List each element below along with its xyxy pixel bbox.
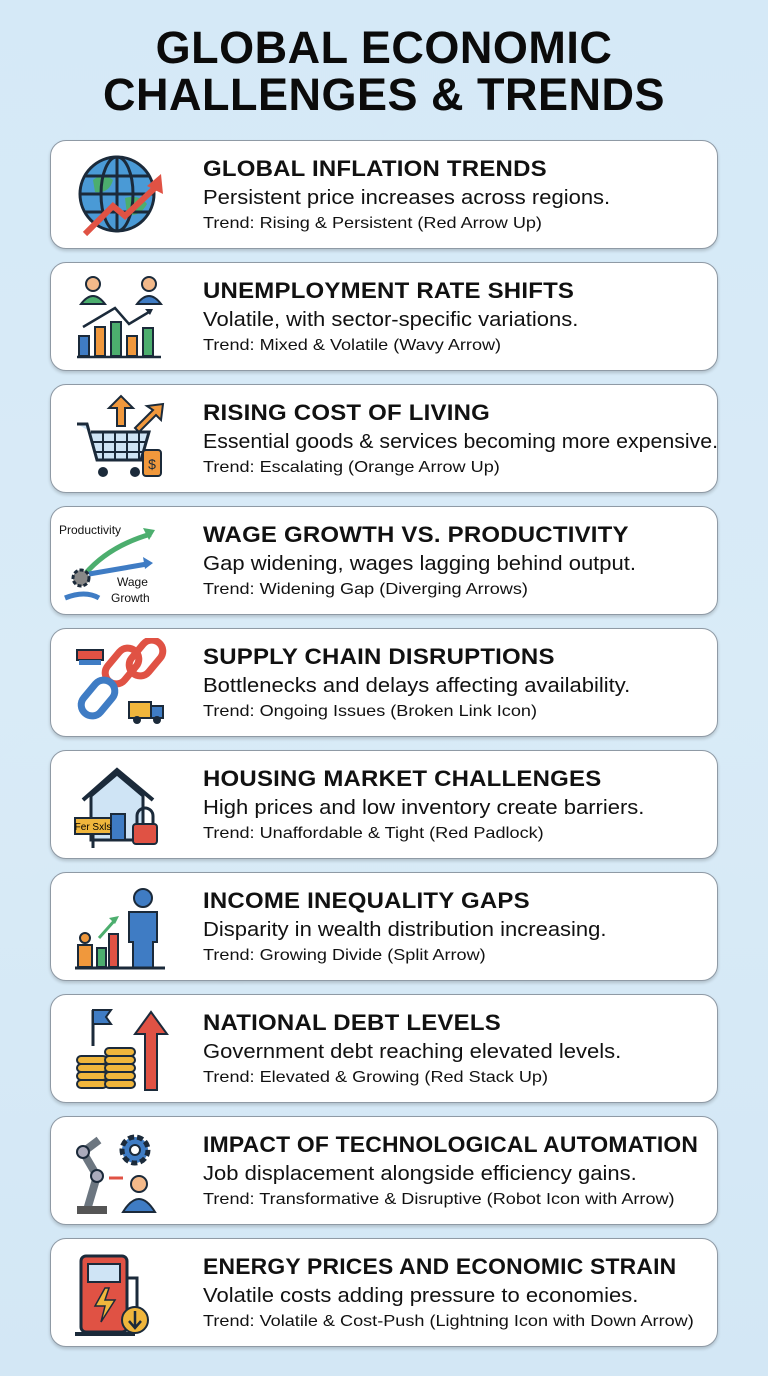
text: inequality: Trend: Growing Divide (Split Arrow) [203, 947, 486, 964]
icon: diverging arrows: Wage [117, 575, 148, 589]
text: housing: HOUSING MARKET CHALLENGES [203, 766, 601, 791]
icon: house with padlock [74, 767, 158, 848]
text: energy [203, 1254, 694, 1330]
panel: national debt [50, 994, 718, 1103]
text: inflation: GLOBAL INFLATION TRENDS [203, 156, 547, 181]
text: inequality: INCOME INEQUALITY GAPS [203, 888, 530, 913]
icon: broken chain [76, 638, 166, 724]
icon: diverging arrows: Growth [111, 591, 150, 605]
text: supply chain: Bottlenecks and delays affecting availability. [203, 675, 630, 697]
panel: automation [50, 1116, 718, 1225]
panel: wage vs productivity [50, 506, 718, 615]
text: unemployment: Volatile, with sector-specific variations. [203, 309, 578, 331]
title [103, 22, 665, 120]
text: energy: ENERGY PRICES AND ECONOMIC STRAIN [203, 1254, 676, 1279]
text: automation: Job displacement alongside efficiency gains. [203, 1163, 637, 1185]
icon: small and large person [75, 888, 165, 970]
panel: cost of living [50, 384, 718, 493]
panel: unemployment [50, 262, 718, 371]
icon: shopping cart: $ [148, 456, 156, 472]
text: automation: IMPACT OF TECHNOLOGICAL AUTOMATION [203, 1132, 698, 1157]
text: automation: Trend: Transformative & Disruptive (Robot Icon with Arrow) [203, 1191, 675, 1208]
panel: inequality [50, 872, 718, 981]
text: energy: Volatile costs adding pressure to economies. [203, 1285, 638, 1307]
icon: robot arm and person [76, 1134, 157, 1214]
text: wage: Gap widening, wages lagging behind output. [203, 553, 636, 575]
icon: coin stack and arrow [76, 1009, 169, 1091]
icon: shopping cart [77, 394, 164, 477]
text: unemployment: UNEMPLOYMENT RATE SHIFTS [203, 278, 574, 303]
panel: inflation [50, 140, 718, 249]
text: unemployment: Trend: Mixed & Volatile (Wavy Arrow) [203, 337, 501, 354]
panel: energy [50, 1238, 718, 1347]
text: housing: Trend: Unaffordable & Tight (Red Padlock) [203, 825, 544, 842]
text: unemployment [203, 278, 578, 354]
text: wage: Trend: Widening Gap (Diverging Arrows) [203, 581, 528, 598]
text: supply chain: SUPPLY CHAIN DISRUPTIONS [203, 644, 555, 669]
text: cost of living: Trend: Escalating (Orange Arrow Up) [203, 459, 500, 476]
text: wage: WAGE GROWTH VS. PRODUCTIVITY [203, 522, 629, 547]
text: wage [203, 522, 636, 598]
panel: housing [50, 750, 718, 859]
text: cost of living [203, 400, 718, 476]
text: automation [203, 1132, 698, 1208]
text: inequality [203, 888, 607, 964]
text: cost of living: RISING COST OF LIVING [203, 400, 490, 425]
text: cost of living: Essential goods & services becoming more expensive. [203, 431, 718, 453]
text: inflation [203, 156, 610, 232]
text: debt: NATIONAL DEBT LEVELS [203, 1010, 501, 1035]
panel: supply chain [50, 628, 718, 737]
text: housing: High prices and low inventory create barriers. [203, 797, 644, 819]
text: debt [203, 1010, 621, 1086]
icon: people and bars [77, 276, 163, 358]
title: CHALLENGES & TRENDS [103, 69, 665, 120]
icon: diverging arrows [59, 523, 155, 605]
icon: house with padlock: Fer Sxls [75, 822, 111, 833]
icon: diverging arrows: Productivity [59, 523, 121, 537]
text: inequality: Disparity in wealth distribution increasing. [203, 919, 607, 941]
text: inflation: Trend: Rising & Persistent (Red Arrow Up) [203, 215, 542, 232]
text: debt: Trend: Elevated & Growing (Red Stack Up) [203, 1069, 548, 1086]
title: GLOBAL ECONOMIC [156, 22, 612, 73]
text: supply chain [203, 644, 630, 720]
text: inflation: Persistent price increases across regions. [203, 187, 610, 209]
text: supply chain: Trend: Ongoing Issues (Broken Link Icon) [203, 703, 537, 720]
text: debt: Government debt reaching elevated levels. [203, 1041, 621, 1063]
icon: fuel pump with lightning [75, 1254, 149, 1336]
text: housing [203, 766, 644, 842]
icon: globe with arrow [78, 156, 163, 236]
text: energy: Trend: Volatile & Cost-Push (Lightning Icon with Down Arrow) [203, 1313, 694, 1330]
